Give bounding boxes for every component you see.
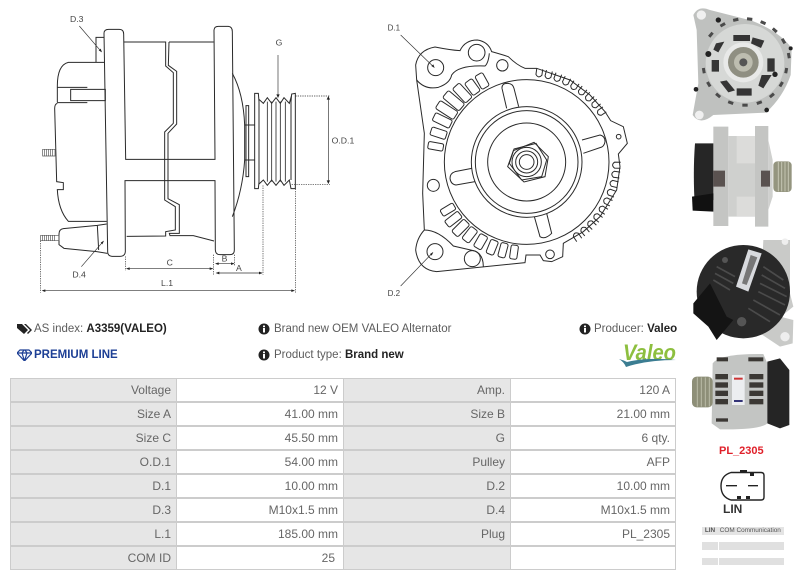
row: size A: 21.00 mm — [617, 407, 670, 421]
dimension labels: L.1 — [161, 278, 173, 288]
plug pin type: LIN — [723, 502, 742, 516]
row: COM ID: 25 — [322, 551, 335, 565]
row: D.3 — [11, 499, 675, 521]
row: D.1: D.2 — [486, 479, 505, 493]
dimension labels: C — [167, 258, 173, 268]
row: D.3: D.3 — [152, 503, 171, 517]
dimension labels: A — [236, 263, 242, 273]
specifications table — [10, 378, 676, 570]
row: size C: G — [496, 431, 505, 445]
dimension labels: G — [276, 37, 283, 47]
row: O.D.1: 54.00 mm — [285, 455, 338, 469]
row: size C: 45.50 mm — [285, 431, 338, 445]
row: D.1: D.1 — [152, 479, 171, 493]
row: L.1: 185.00 mm — [278, 527, 338, 541]
row: L.1 — [11, 523, 675, 545]
plug label: PL_2305 — [719, 445, 764, 457]
info: AS index: AS index: A3359(VALEO) — [34, 323, 167, 335]
dimension labels — [70, 14, 354, 288]
dimension labels: B — [222, 254, 228, 264]
front view labels: D.2 — [388, 289, 401, 298]
row: D.1: 10.00 mm — [285, 479, 338, 493]
row: size A — [11, 403, 675, 425]
front view labels: D.1 — [388, 24, 401, 33]
dimension labels: O.D.1 — [332, 136, 354, 146]
row: voltage: Amp. — [477, 383, 505, 397]
row: O.D.1 — [11, 451, 675, 473]
side view technical drawing — [40, 14, 354, 293]
photo: alternator with pulley — [692, 354, 789, 429]
row: size A: 41.00 mm — [285, 407, 338, 421]
row: voltage: Voltage — [131, 383, 171, 397]
row: D.1 — [11, 475, 675, 497]
row: size C: Size C — [136, 431, 171, 445]
row: L.1: Plug — [481, 527, 505, 541]
row: D.3: M10x1.5 mm — [269, 503, 338, 517]
row: size C — [11, 427, 675, 449]
row: voltage — [11, 379, 675, 401]
row: D.3: D.4 — [486, 503, 505, 517]
info: premium line: PREMIUM LINE — [34, 349, 118, 361]
dimension labels: D.4 — [72, 270, 86, 280]
pin table — [702, 527, 784, 565]
row: size C: 6 qty. — [642, 431, 670, 445]
row: COM ID — [11, 547, 675, 569]
row: voltage: 120 A — [639, 383, 670, 397]
row: O.D.1: Pulley — [472, 455, 505, 469]
front view labels — [388, 24, 401, 298]
photo: alternator side — [692, 126, 792, 227]
row: D.1: 10.00 mm — [617, 479, 670, 493]
row: COM ID: COM ID — [128, 551, 171, 565]
icon: plug connector — [720, 470, 765, 501]
row: size A: Size A — [137, 407, 171, 421]
row: O.D.1: AFP — [647, 455, 670, 469]
row: L.1: PL_2305 — [622, 527, 670, 541]
pin row: LIN: LIN — [705, 527, 715, 534]
info: brand new OEM: Brand new OEM VALEO Alternator — [274, 323, 451, 335]
photo: alternator front — [693, 8, 793, 120]
photo: alternator back — [693, 238, 793, 347]
dimension lines — [41, 26, 330, 293]
row: O.D.1: O.D.1 — [140, 455, 171, 469]
dimension labels: D.3 — [70, 14, 84, 24]
pin row: LIN — [702, 527, 784, 535]
product photos — [692, 8, 794, 430]
row: D.3: M10x1.5 mm — [601, 503, 670, 517]
row: L.1: L.1 — [154, 527, 171, 541]
row: size A: Size B — [470, 407, 505, 421]
info: product type: Product type: Brand new — [274, 349, 404, 361]
front view technical drawing — [388, 24, 628, 298]
info: producer: Producer: Valeo — [594, 323, 677, 335]
row: voltage: 12 V — [313, 383, 338, 397]
pin row: LIN: COM Communication — [720, 527, 781, 534]
